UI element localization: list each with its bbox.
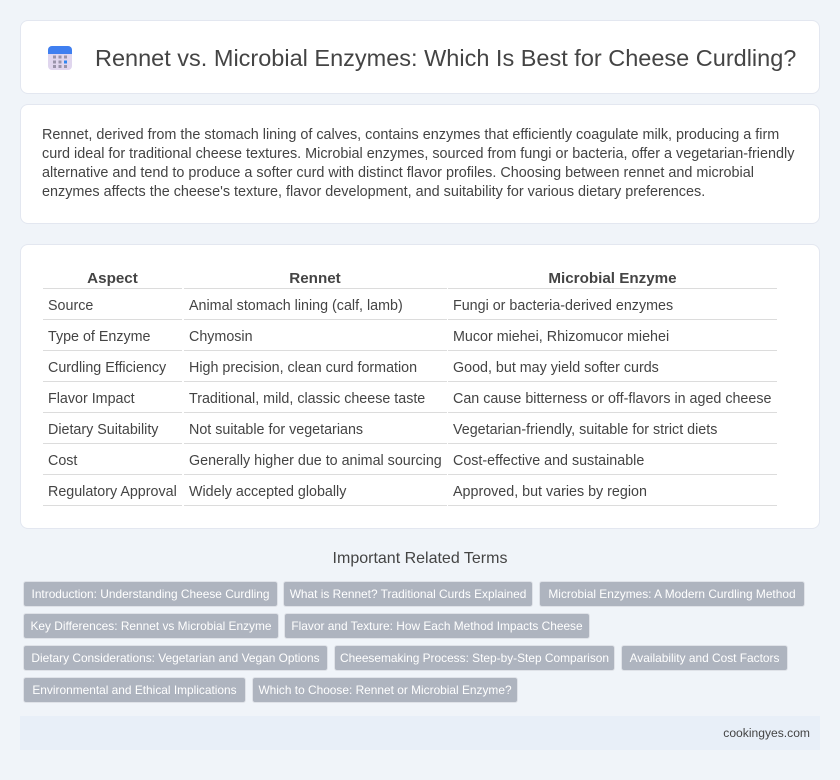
table row: source: Animal stomach lining (calf, lamb)	[189, 298, 403, 314]
table row: flavor impact: Flavor Impact	[48, 391, 135, 407]
table row: dietary suitability: Dietary Suitability	[48, 422, 158, 438]
panel: title header	[20, 20, 820, 94]
tag: Cheesemaking Process: Step-by-Step Comparison	[340, 651, 609, 665]
title: Rennet vs. Microbial Enzymes: Which Is Best for Cheese Curdling?	[95, 45, 796, 71]
tag list: related terms	[23, 581, 805, 703]
text block: introduction paragraph: alternative and tend to produce a softer curd with distinct flavor profiles. Choosing between rennet and microbial	[42, 165, 754, 181]
table row: type of enzyme: Chymosin	[189, 329, 253, 345]
tag	[283, 581, 533, 607]
tag: Which to Choose: Rennet or Microbial Enzyme?	[258, 683, 512, 697]
panel: introduction	[20, 104, 820, 224]
panel: comparison table	[20, 244, 820, 529]
text block: introduction paragraph: curd ideal for traditional cheese textures. Microbial enzymes, sourced from fungi or bacteria, offer a vegetarian-friendly	[42, 146, 794, 162]
tag: Availability and Cost Factors	[630, 651, 779, 665]
table row: curdling efficiency: Curdling Efficiency	[48, 360, 166, 376]
table row: type of enzyme	[43, 319, 777, 345]
text block: introduction paragraph: Rennet, derived from the stomach lining of calves, contains enzymes that efficiently coagulate milk, producing a firm	[42, 127, 779, 143]
tag: Microbial Enzymes: A Modern Curdling Method	[548, 587, 796, 601]
table row: cost: Cost-effective and sustainable	[453, 453, 644, 469]
table header: Rennet	[289, 270, 341, 287]
table row: source: Fungi or bacteria-derived enzymes	[453, 298, 673, 314]
table row: curdling efficiency: High precision, clean curd formation	[189, 360, 417, 376]
table row: regulatory approval: Approved, but varies by region	[453, 484, 647, 500]
tag	[23, 581, 278, 607]
table row: flavor impact	[43, 381, 777, 407]
tag: Introduction: Understanding Cheese Curdling	[32, 587, 269, 601]
table row: regulatory approval: Widely accepted globally	[189, 484, 346, 500]
heading: important related terms: Important Related Terms	[333, 550, 507, 567]
tag	[252, 677, 518, 703]
table header: Aspect	[87, 270, 138, 287]
table header	[87, 270, 677, 287]
table row: dietary suitability: Vegetarian-friendly, suitable for strict diets	[453, 422, 717, 438]
table row: flavor impact: Traditional, mild, classic cheese taste	[189, 391, 425, 407]
tag	[23, 645, 328, 671]
table row: source: Source	[48, 298, 93, 314]
tag	[539, 581, 805, 607]
tag	[23, 677, 246, 703]
tag	[23, 613, 279, 639]
text block: introduction paragraph	[42, 127, 794, 200]
table row: flavor impact: Can cause bitterness or off-flavors in aged cheese	[453, 391, 771, 407]
table row: cost	[43, 443, 777, 469]
footer source label: cookingyes.com	[723, 726, 810, 740]
tag	[621, 645, 788, 671]
footer bar	[20, 716, 820, 750]
table row: dietary suitability	[43, 412, 777, 438]
tag: What is Rennet? Traditional Curds Explained	[290, 587, 526, 601]
tag	[334, 645, 615, 671]
table row: dietary suitability: Not suitable for vegetarians	[189, 422, 363, 438]
table row: source	[43, 288, 777, 314]
table row: curdling efficiency: Good, but may yield softer curds	[453, 360, 659, 376]
table row: type of enzyme: Mucor miehei, Rhizomucor miehei	[453, 329, 669, 345]
tag	[284, 613, 590, 639]
table row: cost: Generally higher due to animal sourcing	[189, 453, 442, 469]
text block: introduction paragraph: enzymes affects the cheese's texture, flavor development, and suitability for various dietary preferences.	[42, 184, 705, 200]
table row: regulatory approval: Regulatory Approval	[48, 484, 177, 500]
table row: cost: Cost	[48, 453, 77, 469]
table header: Microbial Enzyme	[548, 270, 677, 287]
table row: regulatory approval	[43, 474, 777, 506]
tag: Flavor and Texture: How Each Method Impacts Cheese	[291, 619, 583, 633]
tag: Key Differences: Rennet vs Microbial Enzyme	[30, 619, 272, 633]
icon: calendar	[48, 46, 72, 70]
table row: curdling efficiency	[43, 350, 777, 376]
tag: Dietary Considerations: Vegetarian and Vegan Options	[31, 651, 320, 665]
table row: type of enzyme: Type of Enzyme	[48, 329, 151, 345]
tag: Environmental and Ethical Implications	[32, 683, 237, 697]
